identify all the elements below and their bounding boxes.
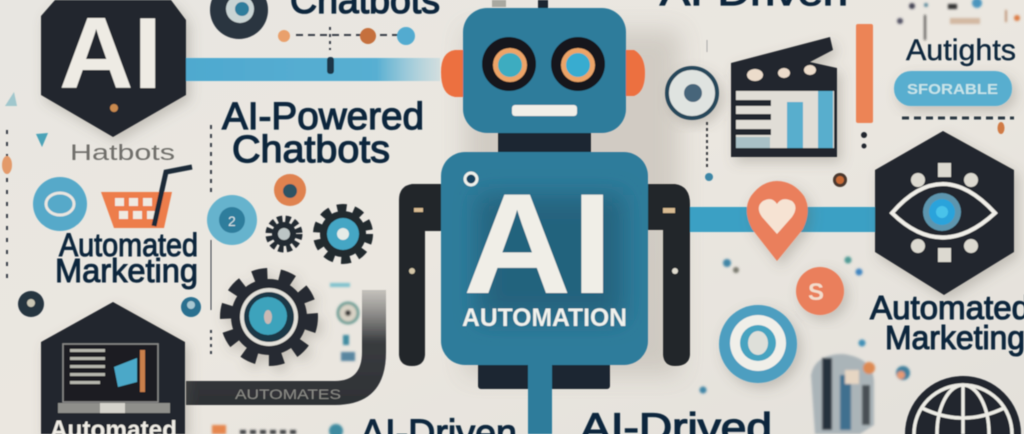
right hexagon eye badge bbox=[875, 131, 1014, 295]
building icon bbox=[811, 354, 875, 434]
globe icon bbox=[905, 376, 1021, 434]
top right scattered marks bbox=[897, 0, 1020, 40]
blue circle icon: 2 bbox=[228, 213, 236, 229]
small scattered tech glyphs bbox=[330, 285, 358, 361]
heading: AI-Powered Chatbots bbox=[222, 96, 424, 171]
dotted vertical dividers bbox=[7, 125, 211, 355]
small gear bbox=[269, 219, 299, 249]
robot shadow bbox=[465, 30, 680, 375]
dark curved connector with faded label bbox=[186, 290, 386, 405]
dashed line under pill bbox=[902, 118, 1014, 134]
body indicator bbox=[465, 173, 477, 185]
robot body bbox=[441, 152, 648, 365]
heading: AI-Powered Chatbots: AI-Powered bbox=[222, 96, 424, 138]
faded label: Hatbots: Hatbots bbox=[70, 140, 175, 165]
small dots bbox=[700, 256, 910, 394]
robot ears bbox=[441, 50, 645, 97]
robot head bbox=[463, 8, 626, 133]
blue circle icon bbox=[207, 195, 257, 245]
neck bbox=[498, 133, 591, 153]
left arm bbox=[399, 184, 441, 366]
orange node dot bbox=[833, 173, 847, 187]
location pin with heart bbox=[747, 181, 808, 261]
heading: Automated Marketing left: Marketing bbox=[55, 252, 198, 289]
blue pill label: SFORABLE bbox=[907, 81, 998, 98]
label: Autights: Autights bbox=[906, 34, 1016, 67]
orange arrow circle: S bbox=[808, 279, 824, 306]
mouth bbox=[512, 105, 577, 116]
dotted node line top bbox=[278, 27, 415, 74]
orange eye blob bbox=[274, 174, 306, 206]
blue connector bar top left bbox=[186, 58, 440, 81]
heading: Automated Marketing right bbox=[870, 289, 1024, 356]
small blue user node bbox=[181, 297, 201, 317]
body AI letters: AI bbox=[463, 165, 613, 324]
top dial icon bbox=[210, 0, 268, 39]
blue connector bar right bbox=[690, 207, 875, 232]
medium gear with teal centre bbox=[318, 209, 368, 259]
right eye bbox=[551, 37, 605, 91]
dial icon bbox=[667, 68, 717, 118]
left eye bbox=[482, 37, 536, 91]
orange shopping cart icon bbox=[101, 167, 192, 228]
top-left AI hexagon badge bbox=[41, 0, 186, 137]
orange arrow circle bbox=[796, 267, 844, 315]
bottom-left laptop hexagon badge bbox=[41, 302, 185, 434]
clapperboard chart icon bbox=[731, 37, 837, 157]
heading: AI-Powered Chatbots: Chatbots bbox=[232, 129, 390, 171]
bottom small orange and dark marks bbox=[212, 424, 343, 434]
antenna bbox=[492, 0, 548, 9]
lower block bbox=[478, 362, 610, 389]
AUTOMATION label: AUTOMATION bbox=[462, 304, 627, 332]
blue chat circle icon bbox=[33, 177, 87, 231]
dotted line with marker bbox=[705, 40, 713, 181]
dark curved connector with faded label: AUTOMATES bbox=[235, 386, 341, 402]
blue pill label bbox=[894, 71, 1012, 106]
robot bbox=[399, 0, 690, 434]
body shadow bbox=[478, 195, 623, 320]
bar end markers bbox=[861, 132, 867, 148]
stem bbox=[528, 365, 552, 434]
large gear with teal lens bbox=[227, 275, 311, 359]
heading: Automated Marketing left: Automated bbox=[59, 227, 198, 263]
heading: Automated Marketing left bbox=[55, 227, 198, 289]
blue target icon bbox=[719, 305, 797, 383]
small dark node bbox=[18, 291, 44, 317]
orange vertical bar bbox=[856, 24, 873, 123]
right arm bbox=[648, 184, 690, 366]
small left markers bbox=[2, 92, 48, 174]
top-left AI hexagon badge: AI bbox=[59, 0, 162, 110]
